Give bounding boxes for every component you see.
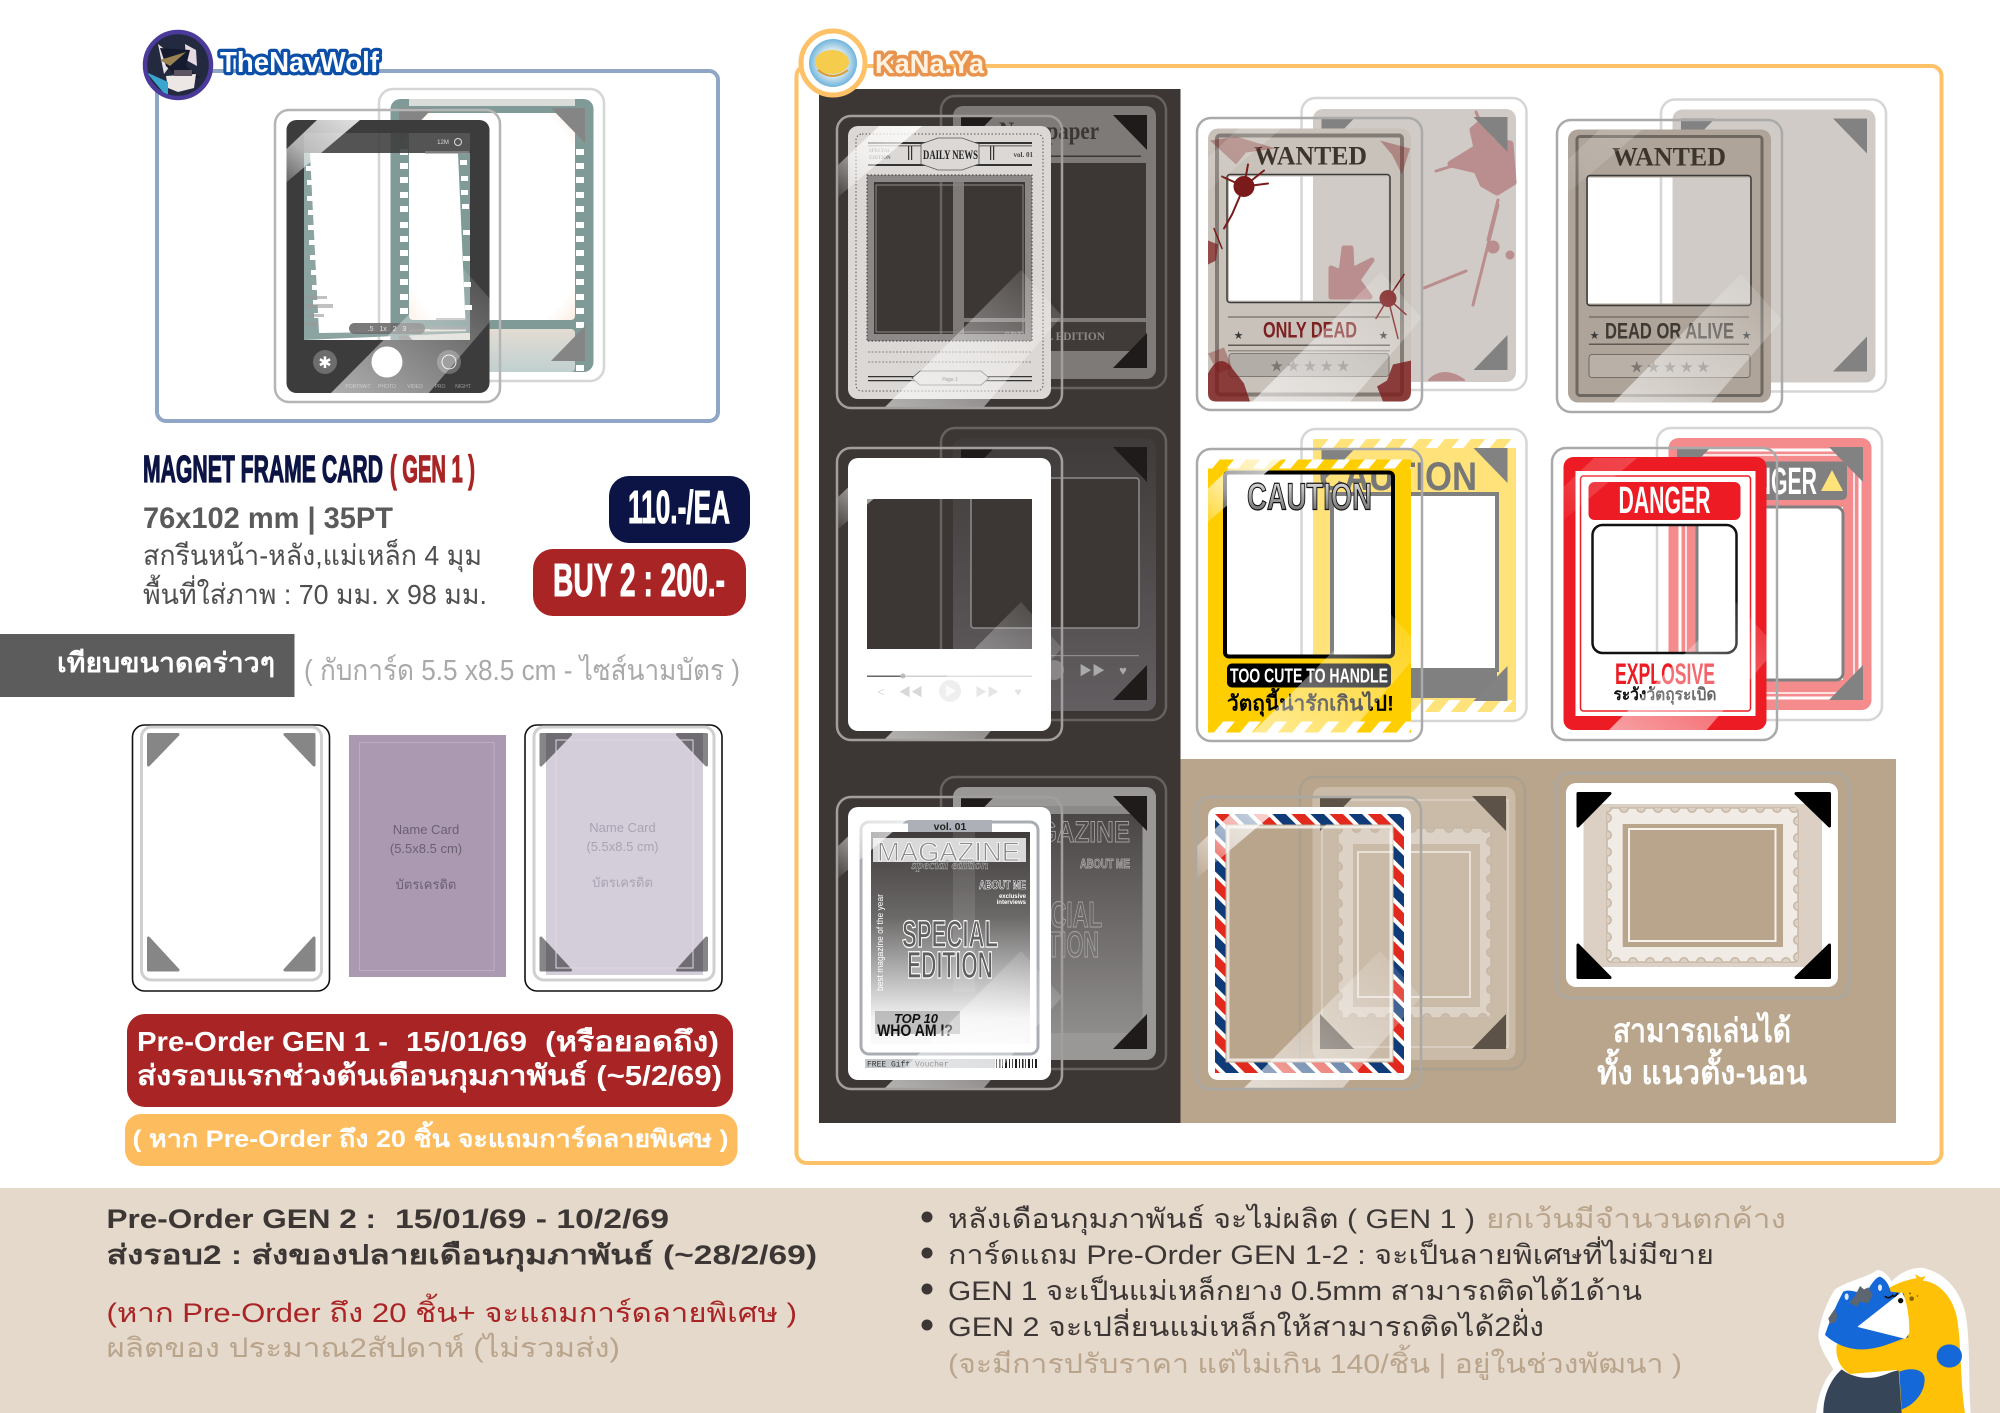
- logo: KaNa.Ya: KaNa.Ya: [875, 48, 984, 79]
- text block: pre-order gen 2: 15/01/69 - 10/2/69: [395, 1204, 669, 1234]
- price pill: each: [609, 476, 750, 543]
- front card: wanted only dead: ★ ★ ★ ★ ★: [1270, 358, 1350, 374]
- banner: pre-order gen 1: ส่งรอบแรกช่วงต้นเดือนกุมภาพันธ์ (~5/2/69): [137, 1060, 722, 1093]
- mascot: wolf and chick: [1816, 1268, 1971, 1413]
- back card: magazine: EDITION: [1011, 924, 1099, 965]
- front card: daily news: vol. 01: [1014, 151, 1033, 159]
- front card: magazine: ABOUT ME: [979, 878, 1026, 892]
- front card: camera screen: .5 1x 2 3: [368, 326, 406, 333]
- front card: daily news: Page 1: [942, 377, 958, 383]
- panel: tan background: [1180, 759, 1896, 1123]
- avatar: TheNavWolf: [145, 32, 211, 98]
- front card: magazine: exclusive: [999, 894, 1027, 900]
- size comparison: card in frame: บัตรเครดิต: [592, 875, 653, 890]
- product: danger frame card pair: [1552, 428, 1882, 740]
- banner: pre-order gen 1: 15/01/69: [406, 1026, 527, 1057]
- front card: danger: ระวังวัตถุระเบิด: [1614, 685, 1716, 705]
- product: newspaper frame card pair: [837, 96, 1166, 408]
- back card: player: ▶▶: [1079, 663, 1105, 678]
- front card: magazine: special edition: [911, 857, 988, 872]
- back card: plain paper: [1661, 100, 1886, 392]
- text block: pre-order gen 2: [106, 1204, 817, 1363]
- text block: notes list: [922, 1203, 1786, 1380]
- front card: caution: TOO CUTE TO HANDLE: [1230, 666, 1388, 688]
- front card: wanted dead or alive: ★: [1742, 330, 1751, 340]
- back card: blood splatter: [1302, 98, 1526, 390]
- front card: caution: วัตถุนี้น่ารักเกินไป!: [1227, 688, 1394, 718]
- front card: danger: DANGER: [1618, 480, 1710, 522]
- back card: newspaper: SPECIAL EDITION: [1004, 329, 1105, 343]
- price pill: buy 2: [533, 549, 746, 616]
- price pill: buy 2: BUY 2 : 200.-: [553, 554, 725, 606]
- front card: wanted dead or alive: ★: [1590, 330, 1599, 340]
- size comparison: card in frame: [525, 725, 722, 991]
- caption: usable both orientations: สามารถเล่นได้: [1613, 1011, 1791, 1049]
- front card: player: <: [877, 685, 885, 699]
- front card: daily news: [848, 126, 1051, 399]
- front card: magazine: [848, 807, 1051, 1080]
- front card: caution: [1208, 460, 1411, 732]
- size comparison: empty frame: [132, 725, 330, 991]
- text block: notes list: GEN 1 จะเป็นแม่เหล็กยาง 0.5mm สามารถติดได้1ด้าน: [948, 1273, 1642, 1306]
- title: MAGNET FRAME CARD: [143, 449, 383, 491]
- size comparison: name card: Name Card: [393, 822, 459, 837]
- banner: gen 1 bonus: [125, 1114, 738, 1166]
- glass overlay: danger: [1552, 448, 1777, 740]
- back card: newspaper: Newspaper: [999, 118, 1099, 145]
- front card: danger: [1564, 457, 1766, 730]
- front card: camera screen: VIDEO: [407, 384, 423, 390]
- text block: specifications: [143, 502, 487, 610]
- text block: pre-order gen 2: Pre-Order GEN 2 :: [106, 1204, 376, 1234]
- banner: pre-order gen 1: (หรือยอดถึง): [545, 1026, 719, 1057]
- banner: gen 1 bonus: ( หาก Pre-Order ถึง 20 ชิ้น จะแถมการ์ดลายพิเศษ ): [132, 1120, 728, 1153]
- back card: player: ♥: [1119, 663, 1127, 678]
- front card: daily news: DAILY NEWS: [923, 147, 978, 162]
- back card: danger: DANGER: [1725, 461, 1817, 503]
- front card: wanted dead or alive: WANTED: [1612, 142, 1726, 172]
- glass overlay: wanted only dead: [1197, 118, 1422, 410]
- glass overlay: wanted dead or alive: [1557, 120, 1782, 412]
- front card: magazine: FREE Gift Voucher: [867, 1060, 949, 1070]
- panel: dark background: [819, 89, 1180, 1123]
- text block: pre-order gen 2: ส่งรอบ2 : ส่งของปลายเดือนกุมภาพันธ์ (~28/2/69): [106, 1239, 817, 1272]
- front card: caution: CAUTION: [1247, 476, 1372, 518]
- front card: camera screen: PRO: [435, 384, 446, 390]
- front card: magazine: MAGAZINE: [877, 837, 1020, 867]
- glass overlay: caution: [1197, 449, 1422, 741]
- back card: newspaper: [941, 96, 1166, 388]
- front card: camera screen: NIGHT: [455, 384, 471, 390]
- product: wanted dead or alive frame card pair: [1557, 100, 1886, 412]
- text block: pre-order gen 2: (หาก Pre-Order ถึง 20 ชิ้น+ จะแถมการ์ดลายพิเศษ ): [106, 1293, 797, 1328]
- front card: player: [848, 458, 1051, 731]
- front card: magazine: EDITION: [907, 945, 993, 987]
- panel: KaNa.Ya outline: [796, 66, 1942, 1163]
- size comparison label bar: เทียบขนาดคร่าวๆ: [57, 648, 275, 678]
- text block: notes list: ยกเว้นมีจำนวนตกค้าง: [1486, 1204, 1786, 1234]
- product: caution frame card pair: [1197, 429, 1526, 741]
- banner: pre-order gen 1: [127, 1014, 733, 1107]
- front card: camera screen: [275, 110, 500, 402]
- logo: TheNavWolf: TheNavWolf: [220, 47, 379, 79]
- front card: camera screen: PORTRAIT: [345, 384, 371, 390]
- text block: notes list: หลังเดือนกุมภาพันธ์ จะไม่ผลิต ( GEN 1 ): [948, 1203, 1475, 1236]
- front card: magazine: vol. 01: [934, 821, 967, 833]
- caption: usable both orientations: [1597, 1011, 1807, 1091]
- front card: wanted only dead: ONLY DEAD: [1263, 318, 1357, 342]
- glass overlay: newspaper: [837, 116, 1062, 408]
- front card: magazine: interviews: [997, 900, 1027, 906]
- back card: magazine: SPECIAL: [1006, 894, 1102, 935]
- front card: danger: EXPLOSIVE: [1615, 658, 1715, 691]
- title: ( GEN 1 ): [390, 449, 475, 491]
- front card: wanted only dead: ★: [1379, 330, 1388, 340]
- front card: camera screen: ✱: [318, 355, 332, 372]
- front card: player: ♥: [1014, 685, 1022, 699]
- text block: notes list: การ์ดแถม Pre-Order GEN 1-2 : จะเป็นลายพิเศษที่ไม่มีขาย: [948, 1236, 1714, 1270]
- product: horizontal stamp card: [1556, 773, 1849, 998]
- front card: wanted dead or alive: DEAD OR ALIVE: [1605, 318, 1734, 344]
- panel: TheNavWolf outline: [157, 71, 718, 421]
- size comparison: name card: บัตรเครดิต: [396, 877, 456, 892]
- product: music player frame card pair: [837, 428, 1166, 740]
- back card: player: [941, 428, 1166, 720]
- glass overlay: airmail: [1196, 797, 1421, 1089]
- size comparison: card in frame: (5.5x8.5 cm): [586, 839, 659, 854]
- front card: magazine: best magazine of the year: [875, 894, 886, 991]
- caption: usable both orientations: ทั้ง แนวตั้ง-นอน: [1597, 1048, 1807, 1091]
- price pill: each: 110.-/EA: [628, 481, 730, 533]
- back card: magazine: ABOUT ME: [1080, 856, 1130, 871]
- glass overlay: magazine: [837, 797, 1062, 1089]
- text block: pre-order gen 2: ผลิตของ ประมาณ2สัปดาห์ (ไม่รวมส่ง): [106, 1332, 620, 1363]
- banner: pre-order gen 1: Pre-Order GEN 1 -: [137, 1026, 388, 1057]
- size comparison label bar: [0, 634, 294, 697]
- text block: specifications: 76x102 mm | 35PT: [143, 502, 393, 535]
- size comparison: name card: (5.5x8.5 cm): [390, 841, 462, 856]
- front card: wanted dead or alive: ★ ★ ★ ★ ★: [1630, 360, 1710, 374]
- front card: wanted only dead: WANTED: [1254, 142, 1367, 170]
- avatar: KaNa.Ya: [801, 31, 865, 95]
- text block: specifications: สกรีนหน้า-หลัง,แม่เหล็ก 4 มุม: [143, 538, 482, 573]
- front card: magazine: TOP 10: [894, 1011, 939, 1026]
- front card: player: ▶▶: [975, 685, 999, 699]
- back card: magazine: [941, 777, 1166, 1069]
- text block: notes list: GEN 2 จะเปลี่ยนแม่เหล็กให้สามารถติดได้2ฝั่ง: [948, 1308, 1544, 1342]
- front card: daily news: EDITION: [869, 156, 891, 161]
- product: airmail frame card pair: [1196, 777, 1525, 1089]
- back card: danger: [1657, 428, 1882, 720]
- size comparison note: ( กับการ์ด 5.5 x8.5 cm - ไซส์นามบัตร ): [304, 653, 740, 687]
- product: camera frame card pair: [275, 89, 604, 402]
- back card: caution: CAUTION: [1319, 455, 1477, 499]
- product: magazine frame card pair: [837, 777, 1166, 1089]
- glass overlay: player: [837, 448, 1062, 740]
- front card: magazine: SPECIAL: [902, 914, 998, 956]
- text block: specifications: พื้นที่ใส่ภาพ : 70 มม. x 98 มม.: [143, 574, 487, 610]
- front card: wanted only dead: ★: [1234, 330, 1243, 340]
- text block: notes list: (จะมีการปรับราคา แต่ไม่เกิน 140/ชิ้น | อยู่ในช่วงพัฒนา ): [948, 1344, 1682, 1380]
- size comparison: card in frame: Name Card: [589, 820, 656, 835]
- front card: wanted dead or alive: [1568, 130, 1771, 402]
- size comparison: name card: [349, 735, 506, 977]
- back card: magazine: MAGAZINE: [1000, 816, 1130, 849]
- back card: stamp: [1300, 777, 1525, 1069]
- front card: camera screen: 12M: [437, 140, 449, 146]
- front card: daily news: SPECIAL: [869, 149, 891, 154]
- product: wanted only dead frame card pair: [1197, 98, 1526, 410]
- front card: wanted only dead: [1208, 128, 1411, 402]
- front card: player: ◀◀: [899, 685, 923, 699]
- back card: film strip: [379, 89, 604, 381]
- front card: camera screen: PHOTO: [378, 384, 396, 390]
- front card: airmail: [1208, 807, 1411, 1080]
- back card: caution: [1302, 429, 1526, 721]
- front card: magazine: WHO AM I?: [877, 1021, 953, 1040]
- footer band: [0, 1188, 2000, 1413]
